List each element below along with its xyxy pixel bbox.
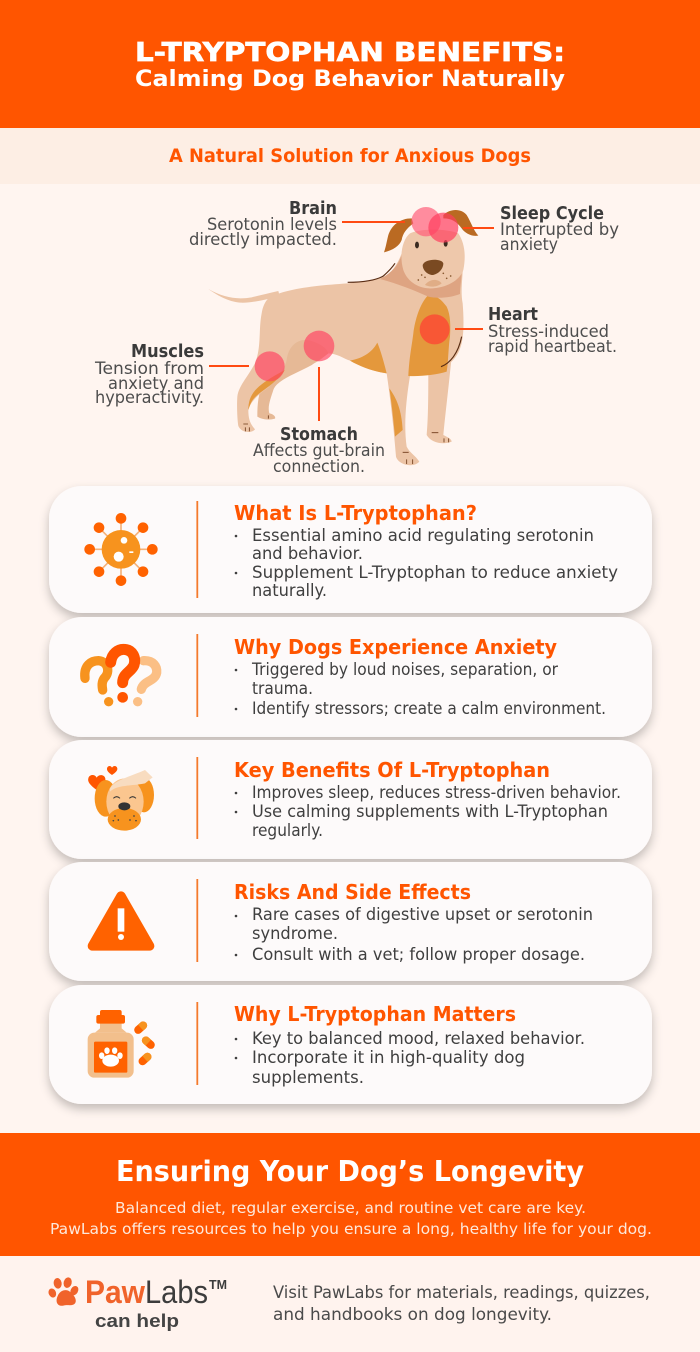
text: key benefits: regularly. bbox=[252, 821, 323, 840]
panel: risks and side effects bbox=[49, 862, 652, 981]
text: risks and side effects: Consult with a vet; follow proper dosage. bbox=[252, 945, 585, 964]
orange patches bbox=[248, 295, 450, 437]
dog tail bbox=[208, 289, 280, 303]
text: what is l-tryptophan: and behavior. bbox=[252, 544, 363, 563]
outline strokes bbox=[348, 263, 462, 367]
text: why dogs experience anxiety bbox=[234, 635, 606, 718]
label connector lines bbox=[209, 222, 494, 421]
label: stomach: connection. bbox=[273, 457, 365, 476]
text: why dogs experience anxiety: Triggered by loud noises, separation, or bbox=[251, 660, 558, 679]
label: sleep cycle: Interrupted by bbox=[500, 220, 619, 239]
text: key benefits: Key Benefits Of L-Tryptophan bbox=[234, 758, 550, 782]
logo wordmark: TM bbox=[209, 1277, 227, 1292]
title: L-TRYPTOPHAN BENEFITS: bbox=[135, 38, 565, 68]
label: stomach bbox=[253, 424, 385, 476]
icon: question marks bbox=[85, 649, 157, 706]
longevity text bbox=[50, 1199, 652, 1238]
label: brain: Brain bbox=[289, 198, 337, 219]
icon: molecule bbox=[84, 513, 158, 586]
footer text: and handbooks on dog longevity. bbox=[273, 1305, 552, 1324]
text: why l-tryptophan matters: Key to balanced mood, relaxed behavior. bbox=[252, 1029, 585, 1048]
label: muscles: Muscles bbox=[131, 341, 204, 362]
logo wordmark bbox=[85, 1274, 227, 1310]
text: why dogs experience anxiety: trauma. bbox=[252, 679, 313, 698]
text: risks and side effects: Rare cases of digestive upset or serotonin bbox=[252, 905, 593, 924]
label: heart: rapid heartbeat. bbox=[488, 337, 617, 356]
text: what is l-tryptophan: naturally. bbox=[252, 581, 327, 600]
panel: key benefits bbox=[49, 740, 652, 859]
label: muscles: anxiety and bbox=[108, 374, 204, 393]
text: why l-tryptophan matters: supplements. bbox=[252, 1068, 364, 1087]
text: what is l-tryptophan: Essential amino acid regulating serotonin bbox=[252, 526, 594, 545]
footer band bbox=[0, 1256, 700, 1352]
label: sleep cycle: Sleep Cycle bbox=[500, 203, 604, 224]
logo wordmark: Labs bbox=[145, 1274, 208, 1310]
dog neck bbox=[380, 255, 462, 298]
label: brain: directly impacted. bbox=[189, 230, 337, 249]
text: key benefits: Use calming supplements with L-Tryptophan bbox=[252, 802, 608, 821]
label: brain bbox=[189, 198, 337, 249]
dog face bbox=[243, 240, 451, 464]
text: what is l-tryptophan bbox=[234, 501, 618, 600]
dog head bbox=[401, 230, 465, 288]
label: heart: Stress-induced bbox=[488, 322, 609, 341]
icon: warning triangle bbox=[92, 896, 150, 946]
icon: logo paw bbox=[47, 1276, 80, 1306]
text: risks and side effects bbox=[234, 880, 593, 964]
panel: why dogs experience anxiety bbox=[49, 617, 652, 737]
far hind leg bbox=[257, 340, 327, 420]
text: risks and side effects: Risks And Side Effects bbox=[234, 880, 471, 904]
text: why l-tryptophan matters: Incorporate it in high-quality dog bbox=[252, 1048, 525, 1067]
panel: why l-tryptophan matters bbox=[49, 985, 652, 1104]
label: sleep cycle bbox=[500, 203, 619, 254]
label: stomach: Affects gut-brain bbox=[253, 441, 385, 460]
dog anatomy illustration bbox=[208, 207, 478, 465]
text: why l-tryptophan matters bbox=[234, 1002, 585, 1087]
panel: what is l-tryptophan bbox=[49, 486, 652, 613]
dog body bbox=[237, 253, 463, 465]
longevity band bbox=[0, 1133, 700, 1256]
far front leg bbox=[427, 357, 452, 443]
logo tagline: can help bbox=[95, 1311, 179, 1331]
logo wordmark: Paw bbox=[85, 1274, 145, 1310]
text: why dogs experience anxiety: Why Dogs Experience Anxiety bbox=[234, 635, 557, 659]
text: what is l-tryptophan: Supplement L-Tryptophan to reduce anxiety bbox=[252, 563, 618, 582]
label: sleep cycle: anxiety bbox=[500, 235, 558, 254]
longevity text: Balanced diet, regular exercise, and routine vet care are key. bbox=[115, 1199, 586, 1217]
text: why l-tryptophan matters: Why L-Tryptophan Matters bbox=[234, 1002, 516, 1026]
label: muscles bbox=[94, 341, 204, 407]
label: heart bbox=[488, 304, 617, 356]
longevity text: PawLabs offers resources to help you ensure a long, healthy life for your dog. bbox=[50, 1220, 652, 1238]
text: what is l-tryptophan: What Is L-Tryptophan? bbox=[234, 501, 477, 525]
subtitle band: A Natural Solution for Anxious Dogs bbox=[169, 145, 531, 167]
header band bbox=[0, 0, 700, 128]
footer text: Visit PawLabs for materials, readings, quizzes, bbox=[273, 1283, 650, 1302]
footer text bbox=[273, 1283, 650, 1324]
dog ears bbox=[384, 210, 478, 252]
title: Calming Dog Behavior Naturally bbox=[135, 66, 565, 92]
text: key benefits bbox=[234, 758, 621, 840]
subtitle band bbox=[0, 128, 700, 184]
text: risks and side effects: syndrome. bbox=[252, 924, 338, 943]
label: heart: Heart bbox=[488, 304, 538, 325]
text: key benefits: Improves sleep, reduces stress-driven behavior. bbox=[252, 783, 621, 802]
longevity heading: Ensuring Your Dog’s Longevity bbox=[116, 1155, 584, 1188]
label: muscles: hyperactivity. bbox=[95, 388, 204, 407]
highlight circles bbox=[255, 207, 458, 381]
label: stomach: Stomach bbox=[280, 424, 358, 445]
title bbox=[135, 38, 565, 92]
text: why dogs experience anxiety: Identify stressors; create a calm environment. bbox=[252, 699, 606, 718]
icon: happy dog bbox=[88, 766, 154, 831]
label: muscles: Tension from bbox=[94, 359, 204, 378]
label: brain: Serotonin levels bbox=[207, 215, 337, 234]
icon: supplement bottle bbox=[88, 1010, 156, 1078]
